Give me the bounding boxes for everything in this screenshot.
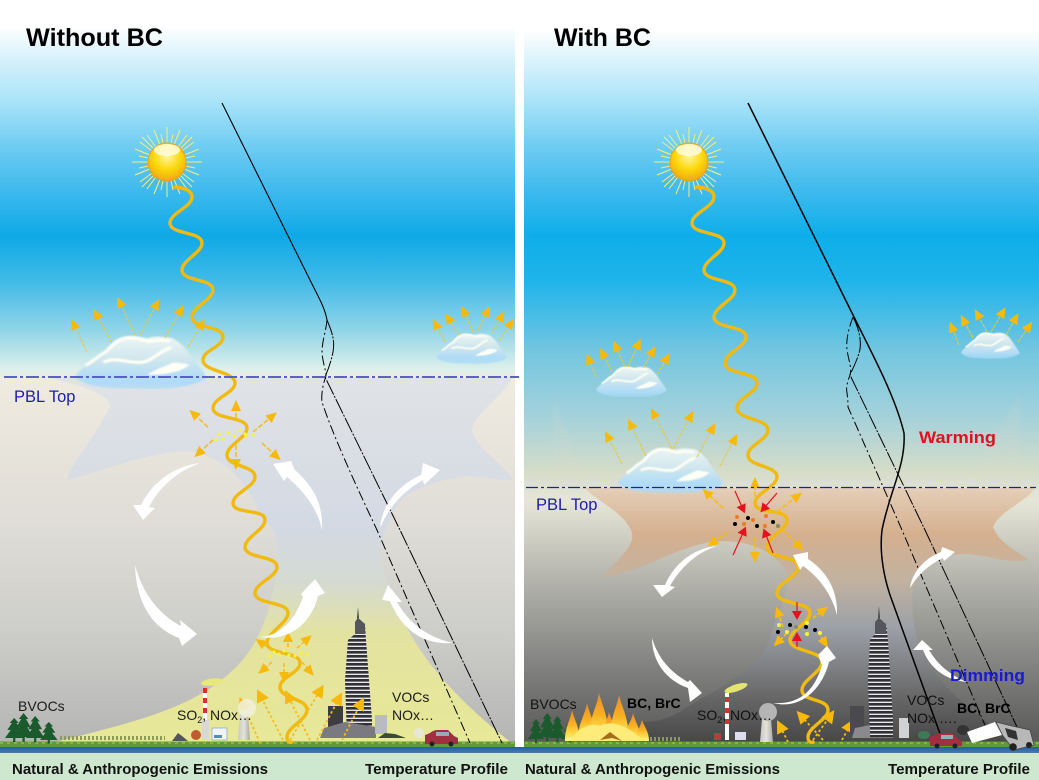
footer: temperature profile left: Temperature Profile <box>365 761 508 778</box>
label: SO2 NOx left: 2 <box>197 715 202 725</box>
plume: faint layer above PBL with BC <box>553 393 1020 488</box>
sun right <box>654 127 724 197</box>
surface reflected arrows without BC <box>244 694 359 743</box>
title: Without BC: Without BC <box>26 24 163 52</box>
icon: car right <box>918 731 962 748</box>
label: VOCs NOx left: NOx… <box>392 707 434 723</box>
label: SO2 NOx left: SO <box>177 707 197 723</box>
ground: soil and water strip <box>0 747 1039 754</box>
solar radiation wave right <box>692 187 828 742</box>
icon: trees right <box>528 713 579 743</box>
plume: polluted boundary layer without BC <box>40 378 513 746</box>
cloud lower right panel <box>618 448 723 493</box>
label: PBL Top left: PBL Top <box>14 388 75 406</box>
arrows: reflection from clouds <box>75 305 1027 466</box>
label: VOCs NOx left: VOCs <box>392 689 429 705</box>
sun left <box>132 127 202 197</box>
label: Warming: Warming <box>919 429 996 447</box>
label: SO2 NOx right: , NOx… <box>722 707 772 723</box>
footer strip <box>0 753 1039 780</box>
footer: temperature profile right: Temperature Profile <box>888 761 1030 778</box>
cloud upper right panel <box>596 366 667 397</box>
absorption arrows in dimming layer <box>796 602 798 647</box>
label: Dimming: Dimming <box>950 666 1025 685</box>
footer: natural and anthropogenic emissions left: Natural & Anthropogenic Emissions <box>12 761 268 778</box>
label: SO2 NOx right: 2 <box>717 715 722 725</box>
label: SO2 NOx left: , NOx… <box>202 707 252 723</box>
label: BVOCs left: BVOCs <box>18 698 65 714</box>
panel: with BC background <box>524 0 1039 748</box>
label: VOCs NOx right: VOCs <box>907 692 944 708</box>
scattering arrows in dimming layer <box>779 612 823 640</box>
surface reflected arrows with BC <box>782 719 848 742</box>
icon: biomass fire <box>565 693 649 741</box>
circulation arrows without BC <box>133 461 453 646</box>
absorption arrows in warming layer <box>733 491 777 555</box>
label: BC BrC fire: BC, BrC <box>627 695 681 711</box>
PBL top line left <box>4 376 519 378</box>
label: SO2 NOx right: SO <box>697 707 717 723</box>
cloud small left panel <box>436 333 507 364</box>
circulation arrows with BC <box>652 546 967 704</box>
scattering arrows in warming layer <box>709 486 797 554</box>
label: VOCs NOx right: NOx …. <box>907 710 957 726</box>
icon: factory right <box>714 681 773 742</box>
ground: grass <box>0 738 1039 747</box>
plume: polluted boundary layer with BC <box>585 488 1034 745</box>
icon: factory left <box>172 677 250 741</box>
aerosol dots aloft without BC <box>214 428 255 442</box>
title: With BC: With BC <box>554 24 651 52</box>
temperature profile without BC <box>222 103 502 743</box>
cloud large left panel <box>75 336 206 389</box>
PBL top line right <box>526 486 1036 488</box>
icon: car left <box>414 728 458 746</box>
icon: city right <box>850 606 909 738</box>
temperature profile with BC <box>748 103 1017 742</box>
label: BVOCs right: BVOCs <box>530 696 577 712</box>
cloud far right panel <box>961 332 1020 359</box>
icon: city left <box>320 607 406 738</box>
aerosol dots near surface without BC <box>268 649 309 658</box>
label: PBL Top right: PBL Top <box>536 496 597 514</box>
icon: trees left <box>5 713 58 744</box>
white gutter between panels <box>515 0 524 747</box>
smoke puff right factory <box>759 703 777 721</box>
footer: natural and anthropogenic emissions right: Natural & Anthropogenic Emissions <box>525 761 780 778</box>
BC particles in dimming layer <box>776 621 822 636</box>
smoke puff left factory <box>238 699 256 717</box>
label: BC BrC traffic: BC, BrC <box>957 700 1011 716</box>
icon: truck <box>957 722 1034 751</box>
solar radiation wave left <box>170 187 307 742</box>
panel: without BC background <box>0 0 515 748</box>
scattering arrows aloft without BC <box>196 409 274 461</box>
BC particles in warming layer <box>733 514 780 528</box>
scattering arrows near surface without BC <box>263 640 308 674</box>
